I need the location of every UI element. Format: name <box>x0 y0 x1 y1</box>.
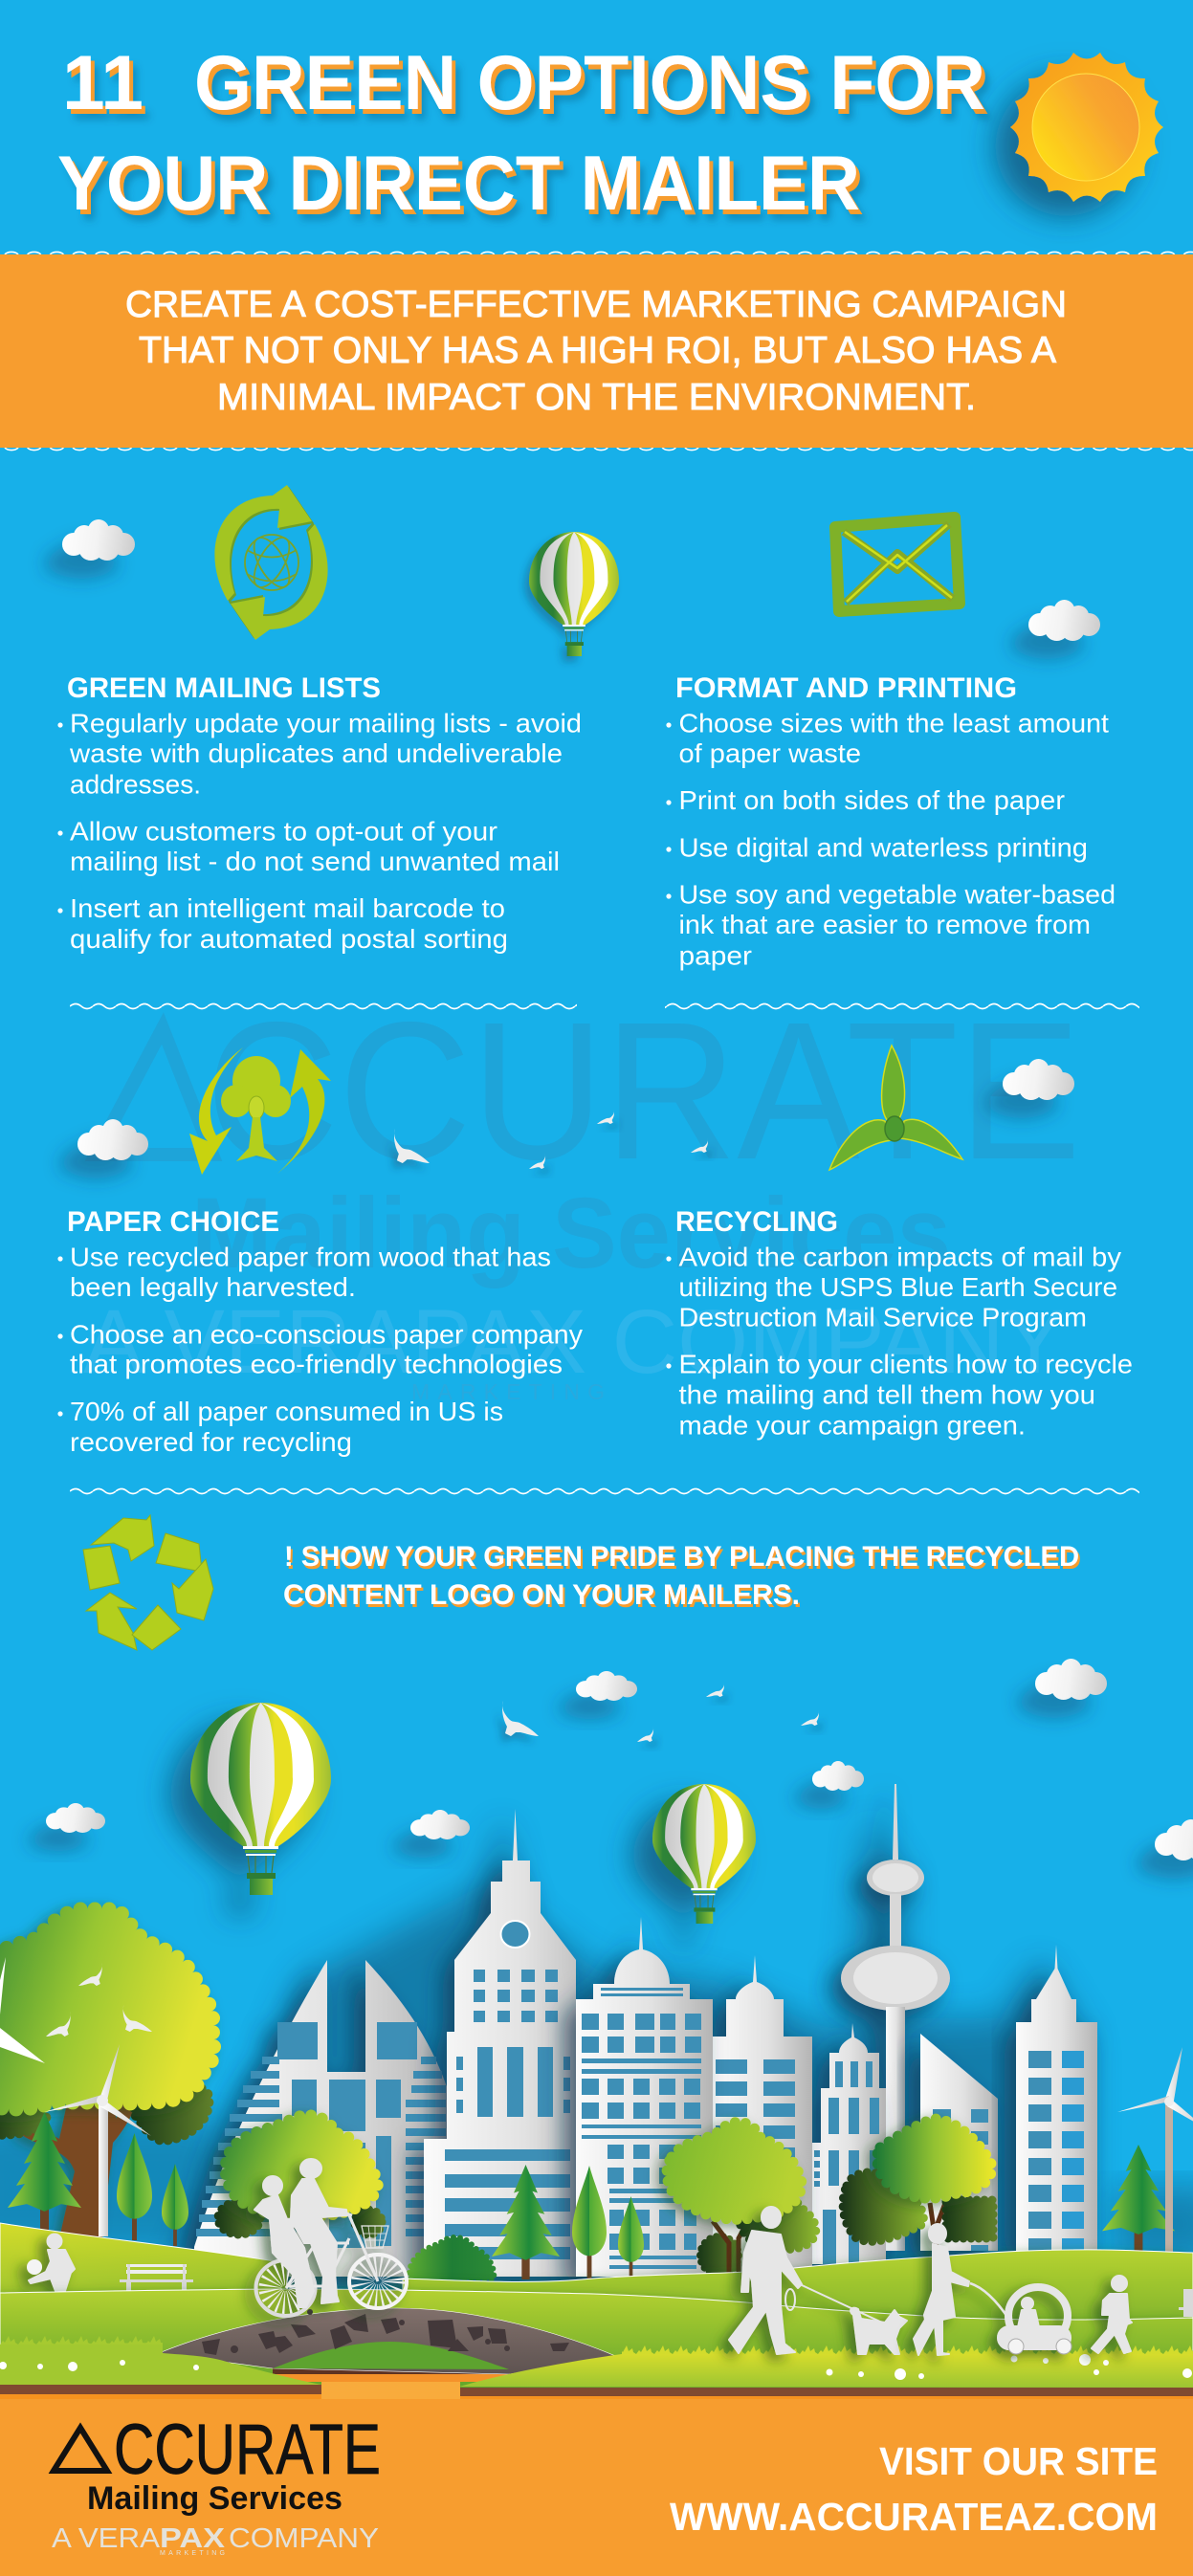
icon: sun <box>1010 53 1163 202</box>
call to action: WWW.ACCURATEAZ.COM <box>670 2495 1158 2539</box>
water and riverbank <box>273 2368 509 2374</box>
icon: cloud <box>62 519 135 561</box>
callout: CONTENT LOGO ON YOUR MAILERS. <box>283 1579 800 1611</box>
bridge <box>159 2308 620 2374</box>
icon: green leaf turbine <box>829 1046 962 1170</box>
heading: FORMAT AND PRINTING <box>675 672 1017 704</box>
tree group walker <box>667 2122 816 2277</box>
intro text: THAT NOT ONLY HAS A HIGH ROI, BUT ALSO HAS A <box>139 330 1056 371</box>
illustration: woman with toy car <box>914 2224 1071 2355</box>
title: GREEN OPTIONS FOR <box>194 40 985 126</box>
panel: green mailing lists <box>57 672 582 954</box>
bullet list: Choose sizes with the least amount <box>679 708 1109 738</box>
heading: GREEN MAILING LISTS <box>67 672 381 704</box>
main gabled building <box>424 1809 607 2277</box>
icon: tree with arrows <box>189 1047 331 1175</box>
icon: cloud mid left <box>77 1119 148 1160</box>
right tower <box>1016 1945 1097 2251</box>
heading: RECYCLING <box>675 1206 838 1238</box>
toy car <box>998 2287 1071 2354</box>
bullet list: addresses. <box>70 769 201 800</box>
title: YOUR DIRECT MAILER <box>57 141 860 227</box>
title: 11 <box>62 40 144 126</box>
tower <box>841 1784 950 2251</box>
back hill right <box>403 2250 1193 2353</box>
icon: globe with recycling arrows <box>214 485 328 640</box>
icon: balloon small top <box>529 532 619 656</box>
icon: bird small one <box>597 1110 614 1124</box>
bullet list: Explain to your clients how to recycle <box>679 1349 1133 1379</box>
logo: Mailing Services <box>87 2480 342 2517</box>
dog <box>851 2308 907 2354</box>
bullet list: Use recycled paper from wood that has <box>70 1242 551 1272</box>
bullet list <box>57 708 582 954</box>
footer panel <box>0 2399 1193 2576</box>
bullet list <box>666 708 1116 970</box>
icon: recycling arrows <box>83 1515 213 1650</box>
back wheel <box>256 2260 316 2316</box>
cypress centre one <box>572 2166 607 2279</box>
watermark logo: MARKETING <box>411 1379 605 1404</box>
bullet list: Regularly update your mailing lists - avoid <box>70 708 582 738</box>
curved shell building <box>194 1960 450 2277</box>
bullet list: Avoid the carbon impacts of mail by <box>679 1242 1121 1272</box>
tree group right <box>843 2119 993 2255</box>
front wheel <box>349 2255 407 2308</box>
bullet list: mailing list - do not send unwanted mail <box>70 847 560 876</box>
bullet list: Destruction Mail Service Program <box>679 1303 1087 1332</box>
bullet list: utilizing the USPS Blue Earth Secure <box>679 1272 1117 1302</box>
bullet list <box>57 1242 583 1457</box>
call to action: VISIT OUR SITE <box>879 2439 1158 2483</box>
intro text: CREATE A COST-EFFECTIVE MARKETING CAMPAIGN <box>125 284 1067 325</box>
tree behind cyclists <box>226 2115 378 2216</box>
panel: paper choice <box>57 1206 583 1457</box>
bullet list: Insert an intelligent mail barcode to <box>70 893 505 923</box>
pine <box>8 2112 81 2232</box>
illustration: cyclists on bicycle <box>254 2159 407 2316</box>
icon: large balloon <box>190 1703 331 1895</box>
tree: big left tree <box>0 1909 214 2238</box>
slanted building <box>920 2034 998 2251</box>
logo <box>52 2410 381 2557</box>
cypress two <box>162 2164 188 2246</box>
bullet list: been legally harvested. <box>70 1272 356 1302</box>
panel: recycling <box>666 1206 1133 1441</box>
bullet list: 70% of all paper consumed in US is <box>70 1397 503 1426</box>
middle hill <box>0 2289 1193 2391</box>
icon: cloud right <box>1028 600 1100 641</box>
watermark logo <box>83 981 1081 1404</box>
watermark logo: A VERAPAX COMPANY <box>83 1291 1065 1393</box>
front ground left <box>0 2336 321 2399</box>
illustration: hills <box>0 2223 1193 2399</box>
logo: MARKETING <box>160 2550 225 2557</box>
bullet list: Use soy and vegetable water-based <box>679 880 1116 909</box>
mid tall building <box>576 1917 713 2277</box>
dark bushes behind cyclists' tree <box>218 2202 382 2235</box>
bullet list: Choose an eco-conscious paper company <box>70 1320 583 1349</box>
logo: A VERA <box>52 2523 161 2554</box>
icon: bird small two <box>529 1154 545 1169</box>
back hill left <box>0 2223 287 2315</box>
bullet list: that promotes eco-friendly technologies <box>70 1349 563 1379</box>
illustration: trees and turbines <box>0 1909 1193 2279</box>
icon: cloud mid right <box>1003 1059 1074 1100</box>
intro text: MINIMAL IMPACT ON THE ENVIRONMENT. <box>217 377 976 418</box>
icon: bird large <box>394 1129 430 1163</box>
bullet list <box>666 1242 1133 1441</box>
icon: bird small three <box>691 1138 708 1153</box>
title <box>57 40 985 227</box>
bike frame and basket <box>286 2212 388 2288</box>
small domed building <box>807 2023 886 2264</box>
bush <box>409 2237 494 2279</box>
intro text <box>125 284 1067 418</box>
cypress centre two <box>618 2196 644 2279</box>
turbine left <box>0 1957 151 2236</box>
bench <box>120 2264 193 2291</box>
soccer player <box>27 2235 75 2291</box>
pine right <box>1102 2145 1175 2253</box>
watermark logo: CCURATE <box>206 981 1081 1200</box>
bullet list: Print on both sides of the paper <box>679 785 1065 815</box>
icon: envelope <box>835 517 960 611</box>
heading: PAPER CHOICE <box>67 1206 279 1238</box>
bullet list: waste with duplicates and undeliverable <box>69 738 563 768</box>
man rider <box>291 2159 347 2303</box>
illustration: child walking <box>1092 2276 1132 2353</box>
bullet list: paper <box>679 941 752 970</box>
bullet list: Use digital and waterless printing <box>679 832 1088 863</box>
icon: medium balloon <box>652 1784 756 1924</box>
call to action <box>670 2439 1158 2539</box>
cypress one <box>117 2133 152 2240</box>
bullet list: qualify for automated postal sorting <box>70 924 508 954</box>
logo: CCURATE <box>114 2410 381 2489</box>
logo: COMPANY <box>229 2523 379 2554</box>
flowers <box>0 2354 1192 2380</box>
callout <box>283 1541 1079 1611</box>
bench far right <box>1179 2289 1193 2317</box>
white birds in tree <box>46 1963 152 2037</box>
bullet list: of paper waste <box>679 738 861 768</box>
watermark logo: Mailing Services <box>191 1178 951 1289</box>
bullet list: recovered for recycling <box>70 1427 352 1457</box>
domed building <box>713 1955 812 2277</box>
woman rider <box>254 2176 314 2307</box>
illustration: paper city skyline <box>194 1784 1097 2277</box>
sky clouds, birds and balloons <box>46 1659 1193 1924</box>
callout: ! SHOW YOUR GREEN PRIDE BY PLACING THE RECYCLED <box>284 1541 1079 1573</box>
logo: PAX <box>160 2523 226 2554</box>
turbine right <box>1117 2047 1193 2253</box>
bullet list: made your campaign green. <box>679 1410 1026 1441</box>
front ground right <box>459 2345 1193 2399</box>
panel: format and printing <box>666 672 1116 970</box>
panel: orange intro banner <box>0 249 1193 452</box>
pine centre <box>492 2165 560 2279</box>
bullet list: ink that are easier to remove from <box>679 910 1091 939</box>
bullet list: Allow customers to opt-out of your <box>70 817 497 846</box>
bullet list: the mailing and tell them how you <box>679 1379 1095 1410</box>
illustration: man walking dog <box>729 2207 907 2354</box>
